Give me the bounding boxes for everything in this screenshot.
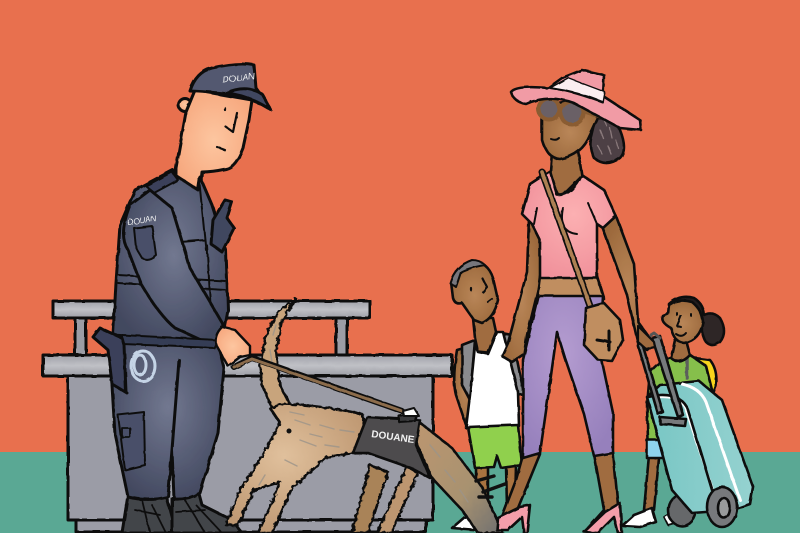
dog harness	[353, 412, 430, 478]
woman midriff	[537, 276, 604, 299]
woman sunglasses	[538, 98, 600, 124]
sniffer dog	[226, 299, 505, 533]
woman hat	[511, 70, 641, 130]
girl backpack	[695, 358, 716, 396]
boy	[450, 260, 524, 530]
harness text: DOUANE	[371, 429, 415, 446]
officer head	[176, 90, 252, 190]
dog ear tufts	[476, 476, 505, 497]
suitcase rear wheel	[668, 494, 696, 526]
girl head	[662, 301, 703, 343]
woman neck	[550, 150, 582, 198]
woman pink top	[522, 171, 616, 278]
officer torso	[113, 170, 228, 343]
boy hair	[450, 260, 485, 287]
boy head	[451, 261, 498, 323]
girl hair	[669, 297, 704, 318]
boy shorts	[468, 425, 522, 468]
girl shoes	[622, 508, 656, 527]
officer face	[217, 108, 237, 150]
desk upper shelf	[53, 301, 370, 318]
floor	[0, 452, 800, 533]
desk posts	[75, 316, 347, 356]
boy legs	[476, 465, 516, 512]
handcuffs	[131, 351, 155, 381]
dog spot	[286, 428, 292, 434]
boy neck	[473, 318, 496, 353]
cap badge text: DOUAN	[222, 71, 256, 85]
customs officer	[93, 64, 271, 533]
girl neck	[671, 340, 690, 361]
officer hand	[216, 327, 250, 366]
woman with hat	[497, 70, 654, 533]
woman right arm	[602, 216, 654, 350]
leash	[234, 358, 402, 411]
holster	[93, 328, 127, 393]
woman head	[542, 100, 598, 159]
dog tail	[260, 299, 296, 408]
girl green shirt	[647, 355, 712, 440]
dog neck and head	[415, 421, 503, 533]
officer radio	[211, 200, 234, 252]
boy backpack	[462, 332, 524, 400]
officer arm	[123, 190, 224, 346]
dog body	[226, 404, 370, 533]
woman left arm	[502, 218, 541, 362]
dog fur marks	[259, 325, 468, 502]
bag strap	[542, 172, 590, 306]
woman shoes	[497, 503, 622, 533]
leash clip	[403, 408, 419, 416]
officer boots	[122, 490, 242, 533]
woman lower legs	[500, 452, 618, 528]
officer belt	[122, 335, 218, 348]
suitcase handle	[638, 336, 686, 426]
hat band	[550, 78, 605, 103]
woman's hand on handle	[638, 326, 655, 349]
woman hair	[590, 118, 624, 163]
sleeve text: DOUAN	[127, 214, 157, 227]
desk body	[68, 374, 433, 520]
girl face	[676, 313, 691, 336]
suitcase front wheel	[707, 487, 737, 527]
girl with suitcase	[622, 297, 753, 527]
desk base	[76, 520, 426, 532]
boy shoe	[452, 516, 478, 530]
boy arm	[454, 345, 475, 425]
officer cap	[190, 64, 271, 110]
woman bag	[584, 303, 623, 361]
trouser pocket	[118, 412, 145, 470]
woman leggings	[523, 296, 613, 458]
customs desk	[43, 301, 452, 532]
girl legs	[644, 455, 659, 510]
boy white tank top	[466, 332, 519, 428]
dog front legs	[226, 299, 503, 533]
sleeve pocket	[134, 226, 156, 259]
boy face	[471, 279, 492, 302]
officer trousers	[112, 340, 224, 500]
girl shorts	[647, 438, 668, 458]
desk counter top	[43, 355, 452, 376]
suitcase	[647, 381, 753, 513]
